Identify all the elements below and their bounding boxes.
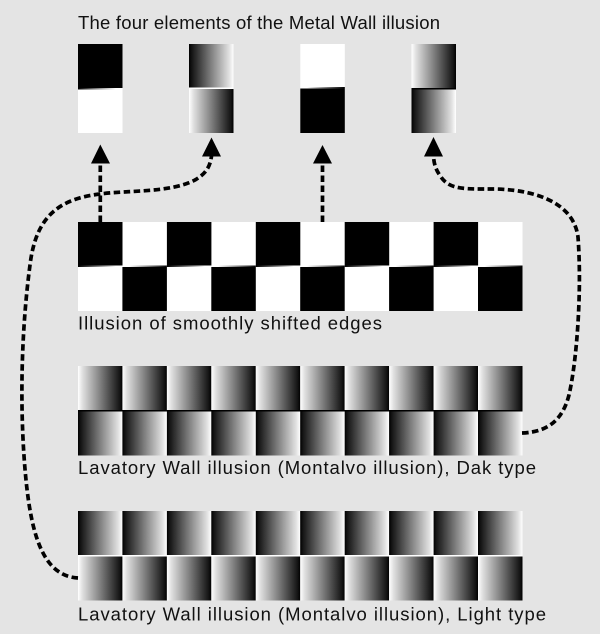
element 1: black over white — [78, 44, 122, 133]
arrow: checkerboard to element 3 — [313, 145, 332, 222]
arrow: light type wall to element 2 — [22, 138, 221, 578]
element 3: white over black — [300, 44, 345, 133]
gradient wall: dark type — [78, 366, 522, 456]
element 4: light gradient over dark gradient — [412, 44, 456, 133]
caption: light type: Lavatory Wall illusion (Montalvo illusion), Light type — [78, 604, 546, 624]
arrow: dark type wall to element 4 — [424, 137, 579, 433]
gradient wall: light type — [78, 511, 522, 600]
caption: checkerboard: Illusion of smoothly shifted edges — [78, 312, 382, 334]
title: The four elements of the Metal Wall illusion — [78, 12, 440, 33]
caption: dark type: Lavatory Wall illusion (Montalvo illusion), Dak type — [78, 457, 536, 478]
element 2: dark gradient over light gradient — [189, 44, 234, 133]
arrow: checkerboard to element 1 — [91, 144, 110, 222]
checkerboard: smoothly shifted edges illusion — [78, 222, 522, 311]
